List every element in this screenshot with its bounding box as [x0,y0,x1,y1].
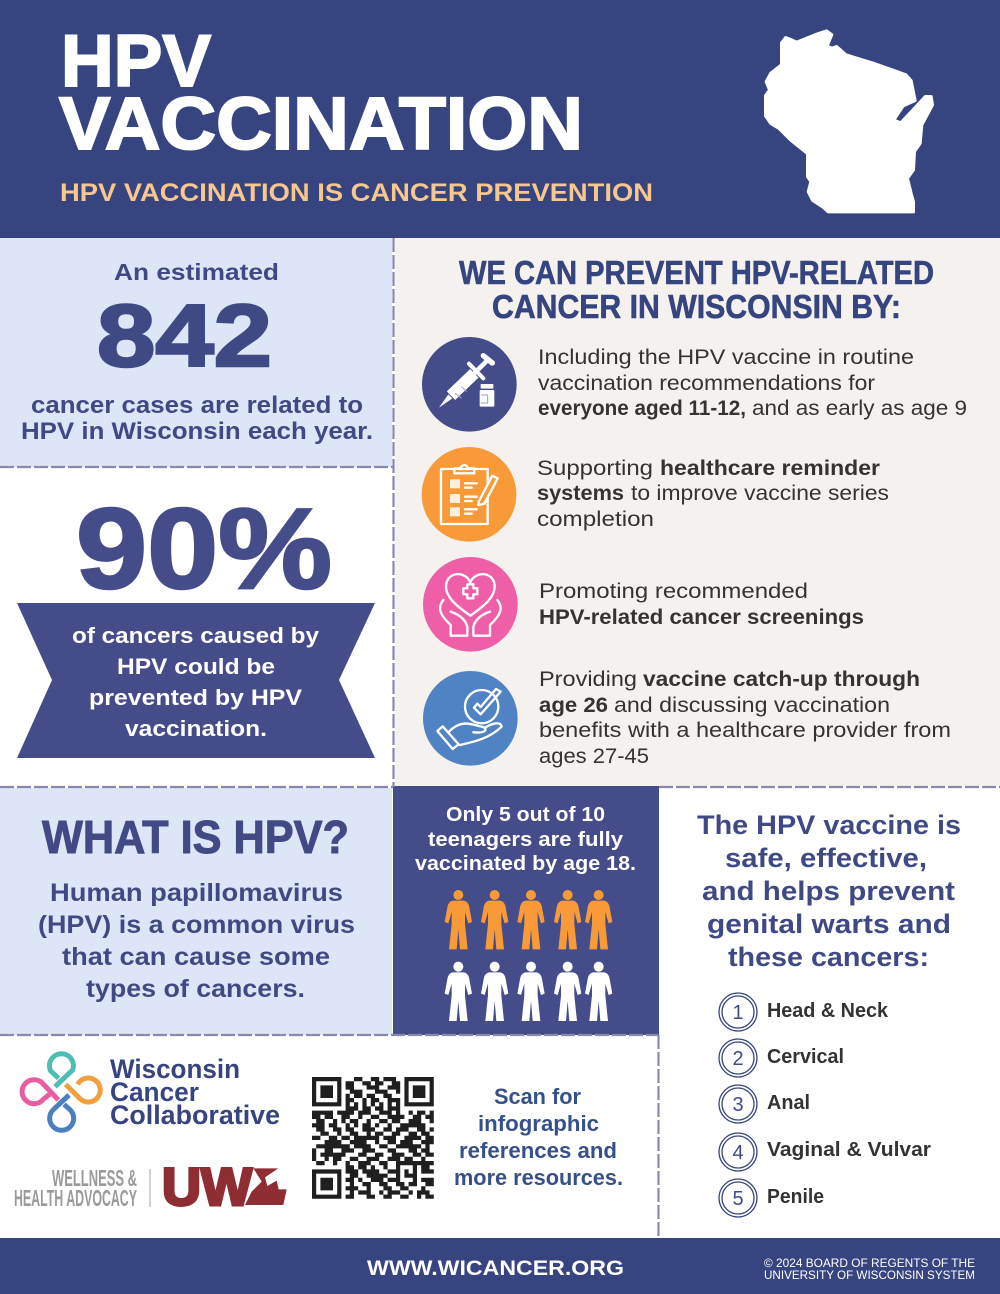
panel: teen vaccination pictogram: vaccinated by age 18. [415,853,636,875]
item 1 text: vaccination recommendations for [538,372,875,395]
numbered cancer list [719,993,931,1217]
heading: safe and effective: these cancers: [728,942,929,972]
heading: safe and effective: and helps prevent [702,876,955,906]
item 1 text: everyone aged 11-12, [538,397,746,420]
QR caption: references and [459,1138,617,1163]
definition text: (HPV) is a common virus [38,911,355,939]
header banner [0,0,1000,238]
title: VACCINATION [59,82,583,165]
logo: Wisconsin Cancer Collaborative: Wisconsin [110,1054,240,1084]
QR caption: Scan for [494,1084,581,1109]
panel: teen vaccination pictogram [393,786,659,1035]
ribbon callout: prevented by HPV [89,685,302,710]
numbered cancer list: Penile [767,1186,824,1208]
heading: we can prevent: WE CAN PREVENT HPV-RELATED [459,254,934,291]
item 4 text: age 26 [539,694,608,717]
panel: what is HPV [0,788,392,1035]
icon: heart in hands [423,557,518,652]
item 2 text: healthcare reminder [660,457,880,480]
footer [0,1238,1000,1294]
definition text [38,879,355,1003]
item 2 text [537,457,889,531]
panel: prevention actions [395,238,1000,786]
copyright: © 2024 BOARD OF REGENTS OF THE [764,1256,975,1270]
item 4 text: vaccine catch-up through [643,668,920,691]
panel: 842 cases [0,238,392,467]
ribbon callout: HPV could be [117,654,275,679]
logo: Wellness and Health Advocacy: WELLNESS & [52,1165,137,1191]
logo: Wisconsin Cancer Collaborative [22,1054,280,1130]
definition text: types of cancers. [86,975,305,1003]
pictogram: 5 vaccinated, orange [445,890,612,949]
numbered cancer list: Head & Neck [767,1000,889,1022]
item 1 text: Including the HPV vaccine in routine [538,346,914,369]
logo: Wellness and Health Advocacy [14,1165,150,1211]
item 1 text [538,346,967,420]
item 3 text [539,580,864,629]
copyright [764,1256,975,1282]
heading: safe and effective: The HPV vaccine is [697,810,961,840]
panel: teen vaccination pictogram: Only 5 out of 10 [446,804,605,826]
item 2 text: to improve vaccine series [631,482,889,505]
item 4 text: benefits with a healthcare provider from [539,719,951,742]
item 4 text [539,668,951,768]
item 1 text: and as early as age 9 [752,397,967,420]
definition text: Human papillomavirus [50,879,343,907]
numbered cancer list: 1 [732,1002,744,1024]
icon: Wisconsin map [765,31,933,212]
numbered cancer list: Vaginal & Vulvar [767,1139,931,1161]
title [59,21,583,165]
item 4 text: and discussing vaccination [614,694,890,717]
heading: we can prevent [459,254,934,325]
subtitle: HPV VACCINATION IS CANCER PREVENTION [60,179,653,207]
panel: 842 cases: cancer cases are related to [31,392,363,419]
statistic: 90%: 90% [76,486,332,613]
panel: 842 cases: An estimated [114,259,279,285]
heading: safe and effective [697,810,961,972]
statistic: 842: 842 [97,286,272,385]
heading: safe and effective: genital warts and [707,909,951,939]
ribbon callout [17,603,375,758]
numbered cancer list: 2 [732,1048,744,1070]
panel: 842 cases: HPV in Wisconsin each year. [21,418,373,445]
logo: Wisconsin Cancer Collaborative: Cancer [110,1077,199,1107]
ribbon callout: vaccination. [125,716,267,741]
heading: we can prevent: CANCER IN WISCONSIN BY: [492,288,901,325]
panel: vaccine helps prevent [660,788,1000,1238]
item 3 text: HPV-related cancer screenings [539,606,864,629]
heading: what is HPV: WHAT IS HPV? [42,811,349,863]
QR caption: more resources. [454,1165,623,1190]
icon: check in hand [423,671,518,766]
logo: UW: UW [162,1158,252,1217]
pictogram: 5 not vaccinated, white [445,962,612,1021]
numbered cancer list: Cervical [767,1046,844,1068]
website: WWW.WICANCER.ORG [367,1257,624,1280]
item 4 text: ages 27-45 [539,745,649,768]
numbered cancer list: 3 [732,1094,744,1116]
copyright: UNIVERSITY OF WISCONSIN SYSTEM [764,1268,975,1282]
ribbon callout: of cancers caused by [72,623,320,648]
icon: clipboard checklist [422,447,516,542]
logo: Wisconsin Cancer Collaborative: Collaborative [110,1100,280,1130]
item 2 text: completion [537,508,654,531]
definition text: that can cause some [62,943,330,971]
item 3 text: Promoting recommended [539,580,808,603]
item 2 text: systems [537,482,624,505]
item 4 text: Providing [539,668,637,691]
numbered cancer list: 5 [732,1188,744,1210]
heading: safe and effective: safe, effective, [725,843,927,873]
numbered cancer list: 4 [732,1142,744,1164]
numbered cancer list: Anal [767,1092,810,1114]
panel: 90 percent [0,468,392,786]
panel: teen vaccination pictogram: teenagers are fully [428,829,624,851]
icon: syringe and vial [422,337,517,432]
QR caption: infographic [478,1111,599,1136]
QR code [312,1079,434,1197]
item 2 text: Supporting [537,457,653,480]
logo: Wellness and Health Advocacy: HEALTH ADVOCACY [14,1185,137,1211]
QR caption [454,1084,623,1190]
title: HPV [61,21,211,102]
